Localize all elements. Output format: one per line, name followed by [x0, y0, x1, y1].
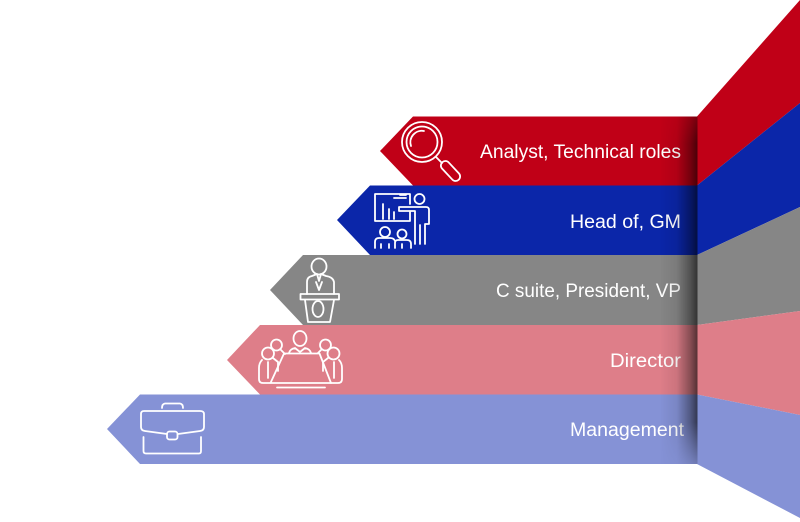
panel: Director — [227, 325, 698, 394]
label: Director: Director — [610, 351, 682, 372]
label: C suite, President, VP: C suite, President, VP — [496, 281, 681, 302]
panel: receding right wall — [697, 0, 800, 518]
panel: C suite, President, VP — [270, 255, 698, 325]
fold shadow — [667, 116, 698, 464]
label: Head of, GM: Head of, GM — [570, 212, 681, 233]
panel: Management — [107, 394, 698, 464]
panel: Head of, GM — [337, 186, 698, 255]
label: Management: Management — [570, 420, 685, 441]
icon: presenter at board — [375, 194, 429, 248]
label: Analyst, Technical roles: Analyst, Technical roles — [480, 142, 681, 163]
icon: magnifying glass — [402, 122, 462, 183]
icon: briefcase — [141, 404, 204, 454]
icon: speaker at podium — [300, 258, 339, 322]
panel: Analyst, Technical roles — [380, 116, 698, 186]
icon: meeting table — [259, 331, 342, 388]
